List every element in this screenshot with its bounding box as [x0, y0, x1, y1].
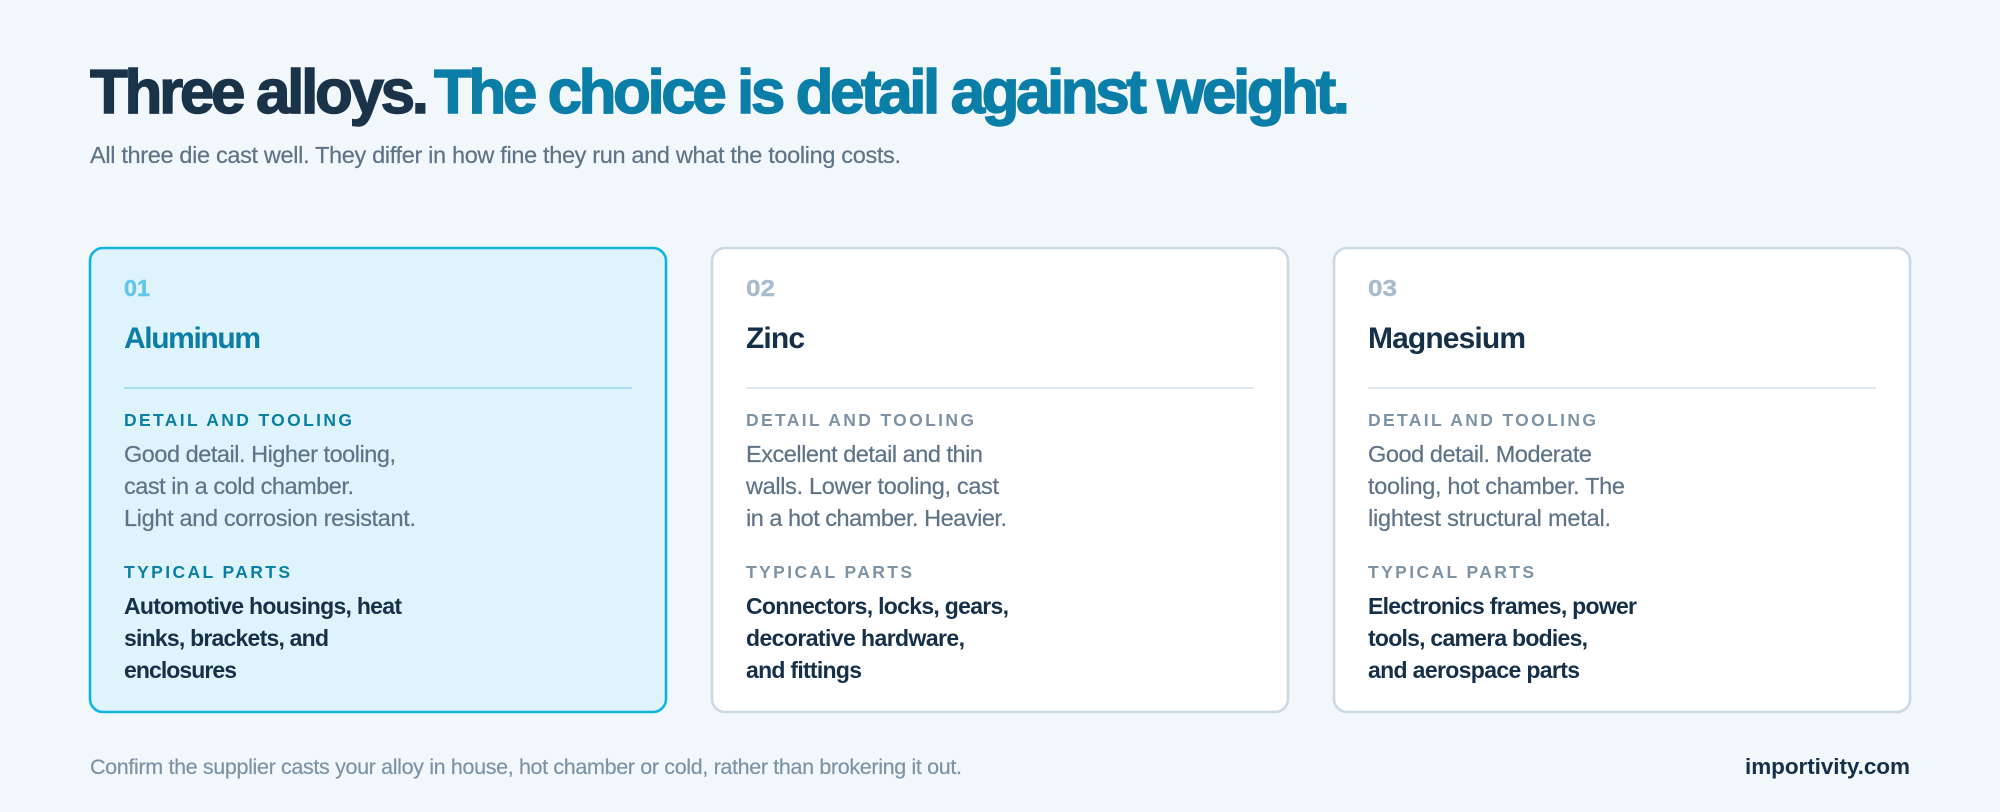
parts text: and aerospace parts [1368, 657, 1580, 683]
detail text: Excellent detail and thin [746, 441, 983, 467]
label: typical parts: TYPICAL PARTS [1368, 562, 1534, 582]
number: 02 [746, 275, 775, 301]
parts text: enclosures [124, 657, 237, 683]
panel: zinc [712, 248, 1288, 712]
detail text: tooling, hot chamber. The [1368, 473, 1625, 499]
parts text: Electronics frames, power [1368, 593, 1637, 619]
detail text [745, 441, 1007, 531]
label: typical parts: TYPICAL PARTS [124, 562, 290, 582]
panel: aluminum [90, 248, 666, 712]
label: detail and tooling: DETAIL AND TOOLING [124, 410, 352, 430]
parts text [124, 593, 402, 683]
detail text [1368, 441, 1625, 531]
parts text: Connectors, locks, gears, [746, 593, 1009, 619]
parts text [746, 593, 1009, 683]
footer note: Confirm the supplier casts your alloy in house, hot chamber or cold, rather than brokering it out. [90, 755, 962, 779]
card background [90, 248, 666, 712]
detail text: walls. Lower tooling, cast [745, 473, 999, 499]
number: 03 [1368, 275, 1397, 301]
label: detail and tooling: DETAIL AND TOOLING [1368, 410, 1596, 430]
detail text [124, 441, 416, 531]
detail text: Light and corrosion resistant. [124, 505, 416, 531]
alloy name: Aluminum [124, 322, 261, 355]
title: Three alloys. [90, 58, 429, 127]
title: The choice is detail against weight. [434, 58, 1350, 127]
label: detail and tooling: DETAIL AND TOOLING [746, 410, 974, 430]
parts text [1368, 593, 1637, 683]
subtitle: All three die cast well. They differ in how fine they run and what the tooling costs. [90, 142, 901, 168]
parts text: tools, camera bodies, [1368, 625, 1588, 651]
detail text: in a hot chamber. Heavier. [746, 505, 1007, 531]
detail text: Good detail. Moderate [1368, 441, 1592, 467]
parts text: sinks, brackets, and [124, 625, 329, 651]
alloy name: Magnesium [1368, 322, 1526, 355]
parts text: and fittings [746, 657, 862, 683]
card background [712, 248, 1288, 712]
parts text: decorative hardware, [746, 625, 965, 651]
detail text: Good detail. Higher tooling, [124, 441, 396, 467]
number: 01 [124, 275, 150, 301]
label: typical parts: TYPICAL PARTS [746, 562, 912, 582]
detail text: lightest structural metal. [1368, 505, 1611, 531]
alloy name: Zinc [746, 322, 805, 355]
parts text: Automotive housings, heat [124, 593, 402, 619]
card background [1334, 248, 1910, 712]
panel: magnesium [1334, 248, 1910, 712]
brand: importivity.com [1745, 754, 1910, 779]
detail text: cast in a cold chamber. [124, 473, 354, 499]
